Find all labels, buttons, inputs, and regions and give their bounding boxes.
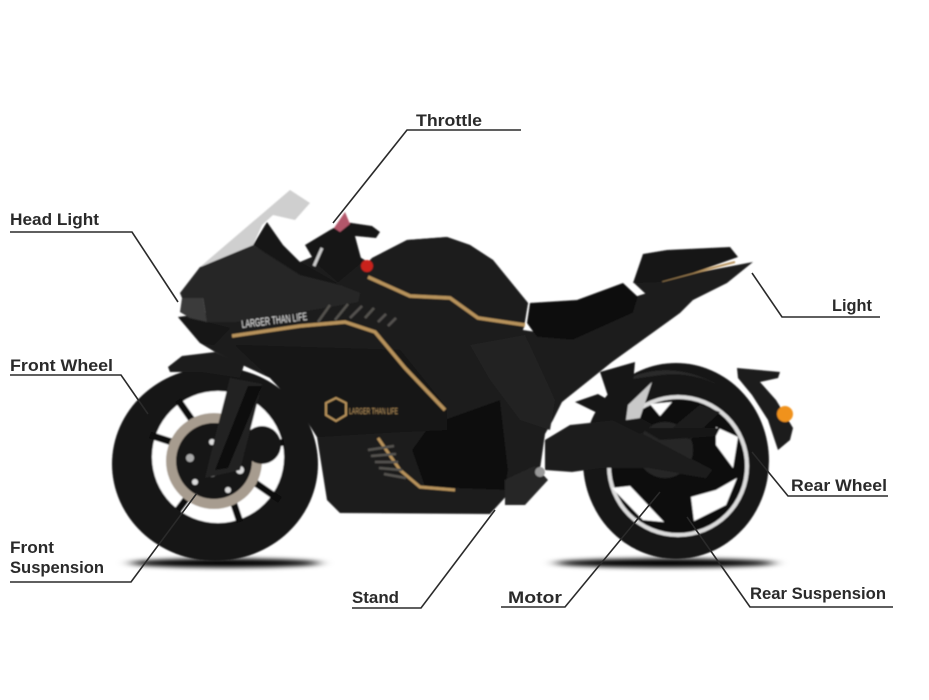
rider seat <box>527 283 638 340</box>
logo badge: LARGER THAN LIFE <box>349 406 398 416</box>
tail stripe <box>662 262 735 281</box>
label: front suspension: Suspension <box>10 558 104 577</box>
rear lamp and plate holder <box>737 368 793 450</box>
logo badge <box>326 398 398 421</box>
ground shadows <box>130 558 775 568</box>
label: throttle: Throttle <box>416 111 482 130</box>
head light leader <box>10 232 178 302</box>
rear wheel leader <box>752 452 888 496</box>
rear suspension leader <box>687 517 893 607</box>
label: rear suspension: Rear Suspension <box>750 584 886 603</box>
icon: orange indicator <box>777 406 793 422</box>
rear wheel <box>583 363 769 559</box>
lower nose <box>178 317 230 345</box>
front wheel leader <box>10 375 148 414</box>
labels <box>10 111 887 607</box>
battery box <box>412 400 508 490</box>
centre frame <box>470 335 555 430</box>
pillion seat <box>633 247 738 283</box>
graphic stripes <box>318 304 406 478</box>
gold stripes <box>232 277 525 490</box>
foot peg <box>505 466 548 505</box>
side fairing panel <box>235 345 447 437</box>
motor leader <box>501 492 660 607</box>
label: front wheel: Front Wheel <box>10 356 113 375</box>
front wheel <box>112 367 318 561</box>
tail section <box>634 262 753 300</box>
label: front suspension <box>10 538 104 577</box>
stand leader <box>352 510 495 608</box>
motorcycle <box>112 190 793 561</box>
fuel tank <box>372 237 528 328</box>
headlight <box>180 298 207 322</box>
label: stand: Stand <box>352 588 399 607</box>
label: rear wheel: Rear Wheel <box>791 476 887 495</box>
label: motor: Motor <box>508 588 562 607</box>
main body and fairing <box>178 237 610 514</box>
swingarm <box>545 362 720 478</box>
front suspension leader <box>10 493 197 582</box>
subframe <box>520 292 693 402</box>
label: light: Light <box>832 296 872 315</box>
handlebar and controls <box>305 212 380 282</box>
shock absorber and heel guard <box>575 394 653 434</box>
label: head light: Head Light <box>10 210 99 229</box>
throttle leader <box>333 130 521 223</box>
body slogan: LARGER THAN LIFE <box>241 311 308 331</box>
front fender <box>168 352 244 378</box>
windscreen <box>200 190 310 267</box>
light leader <box>752 273 880 317</box>
upper nose fairing <box>180 245 360 322</box>
cockpit <box>253 222 340 285</box>
leader lines <box>10 130 893 608</box>
label: front suspension: Front <box>10 538 54 557</box>
